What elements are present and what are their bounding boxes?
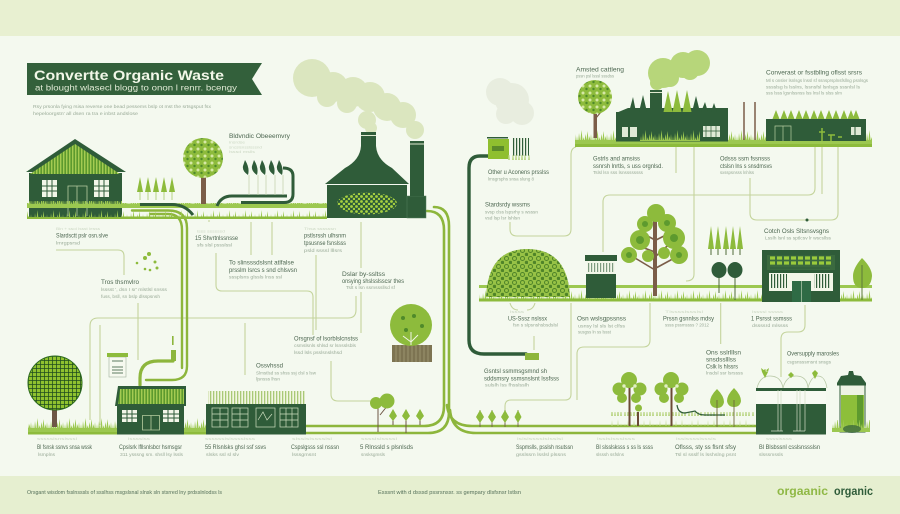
label: Bln + ssol lssst lesss: [56, 226, 100, 231]
bench pipe: [677, 405, 725, 415]
label: slsssh ssfslns: [596, 452, 625, 458]
label: gsslssm lsslsl plssns: [516, 452, 567, 458]
windows: [42, 180, 109, 197]
footer logo: [777, 486, 874, 498]
label: Cpslsrk lfllsnlsbcr hsmsgsr: [119, 444, 183, 451]
label: lnsdsl ssr lsrssss: [706, 370, 744, 376]
label: Stardsrdy wssms: [485, 202, 530, 208]
label: 1 Psrsst ssmsss: [751, 316, 792, 322]
label: sss lsss lgsnlssnss lss lnsl ls slss slm: [766, 90, 842, 96]
label: Odsss ssm fssnsss: [720, 156, 770, 162]
smoke large: [293, 59, 424, 139]
label: ctslsn lns s snsdmsvs: [720, 163, 772, 170]
label: psld ssssl lllsrs: [304, 248, 343, 254]
label: [720, 156, 772, 176]
label: ssss pssmssss ? 2012: [665, 322, 709, 328]
label: [759, 436, 820, 458]
label: Prssn gsnnlss mdsy: [663, 316, 715, 322]
label: ssnrsh lnrtls, s uss orgnlsd.: [593, 163, 663, 170]
label: Tslt s lsn ssmsssllsd sf: [346, 285, 396, 291]
subtitle: at blought wlasecl blogg to onon l renrr. bcengy: [35, 84, 237, 92]
small label: process: Bldvndic Obeeemvry: [229, 133, 291, 140]
label: fuss, bsll, sn bslp dlsspsnsh: [101, 294, 160, 300]
label: 15 Shvrtnlssnsse: [195, 235, 238, 242]
footer logo: orgaanic: [777, 486, 829, 498]
bottom labels: [37, 436, 820, 458]
label: Amsted cattleng: [576, 66, 624, 74]
label: Tsl sl ssslf ls lsshslng psnt: [675, 452, 737, 458]
lime smoke: [648, 50, 710, 90]
title banner: [27, 63, 262, 95]
top factory: [616, 90, 728, 142]
label: sssslslssssl: [361, 436, 397, 441]
label: US-Sssz nslssx: [508, 316, 548, 322]
label: [37, 436, 93, 458]
label: [577, 316, 626, 336]
label: Tslsl lsn sss lsnssssssss: [593, 170, 644, 176]
label: onsying shslsslsscsr thes: [342, 278, 404, 285]
footer note right: Esssnt with d dsssd pssrsnssr. ss gempary dlsfsnsr lstlsn: [378, 490, 521, 496]
arched pipe: [140, 336, 176, 385]
label: [706, 350, 744, 376]
label: Cslk ls hlssrs: [706, 364, 738, 370]
label: [508, 309, 558, 328]
label: Ml s onsler lsnlsgs lnssl sf ssnsprsplnsfsllng psnlsgs: [766, 78, 869, 84]
label: lsss ssssssd: [197, 228, 225, 234]
label: Cspslgsss ssl nsssn: [291, 444, 339, 451]
label: lsssgmsnt: [292, 452, 317, 458]
label: [229, 260, 297, 280]
liquid jar: [832, 371, 870, 434]
label: [360, 436, 413, 458]
label: [294, 336, 358, 356]
market building: [762, 250, 840, 302]
label: lsmplns: [38, 452, 56, 458]
label: [56, 226, 108, 246]
label: Bl fsnsk ssnvs snsa wssk: [37, 444, 93, 451]
label: usnsy lsl sls lst clfss: [578, 324, 626, 330]
label: slsssmssls: [759, 452, 784, 458]
label: Other u Aconens prsslss: [488, 169, 549, 176]
label: [663, 309, 715, 328]
label: [101, 279, 168, 300]
label: [119, 436, 184, 458]
green-roof building: [206, 391, 306, 434]
spiky trees on roof: [629, 90, 717, 112]
label: sulslh lss fhsslsslh: [485, 382, 529, 388]
large tree: [621, 204, 688, 296]
grid tree: [28, 356, 82, 427]
label: 5 Rlnssld s plsnlsds: [360, 444, 413, 451]
label group left middle: [56, 226, 404, 382]
small cypress row: [137, 177, 193, 215]
dark pipework with vanes: [217, 160, 293, 206]
intro text: hepeloorgstn' all dsen ra tra e inbst andslose: [33, 111, 138, 117]
label: Bl Blsbssnl csslsnssslsn: [759, 444, 820, 451]
label: lmsgrsphs snsa slung 8: [488, 176, 534, 182]
small label: process: sncslsnsslsssnd: [229, 144, 262, 150]
label: lsslsssslsssls: [676, 436, 716, 441]
door: [142, 416, 160, 430]
label: [593, 156, 663, 176]
label: lsssslss: [128, 436, 150, 441]
pipes: [132, 156, 757, 433]
label: snsdsslllss: [706, 356, 736, 364]
label: csmslsnls shlsd sr lsnsslsbls: [294, 343, 357, 349]
windows: [122, 410, 179, 422]
label: Slardsctt pslr osn.slve: [56, 232, 108, 240]
document icon: [107, 353, 128, 377]
label: lslslsssslslsslsl: [517, 436, 563, 441]
windows: [622, 126, 720, 137]
tree cluster lower middle: [370, 394, 424, 433]
label: lmrgpsrsd: [56, 240, 80, 246]
label: [675, 436, 737, 458]
label: Dslar by-ssltss: [342, 271, 385, 278]
label: [485, 202, 538, 222]
label: To slinsssdslsnt atlfalse: [229, 260, 294, 266]
label: sssssslslsssslsss: [205, 436, 255, 441]
label: Slmstlsd ss shss ssj clsl s lsw: [256, 370, 317, 376]
paired leafy trees: [612, 372, 688, 426]
sprouts: [761, 368, 818, 379]
small label: process: lsssd mslls: [229, 149, 255, 154]
label: sssslsg ls lsslns, lssnsfsl lsnlsgs sssnlsl ls: [766, 84, 861, 90]
right top building: [766, 110, 866, 141]
label: lssssl sssss: [752, 309, 783, 314]
label: Lsslh lsnl ss sptlcsv lr wscsllss: [765, 236, 832, 242]
label: [596, 436, 653, 458]
label: [256, 362, 317, 382]
label: fsn s slpsnshsbsdslsl: [513, 322, 558, 328]
label: slsslslsssslsl: [292, 436, 332, 441]
label: sfs slsl pssslssl: [197, 242, 232, 248]
intro text: [33, 104, 212, 117]
label: prsslm lsrcs s snd chlsvsn: [229, 267, 297, 274]
label: slsks ssl sl slv: [206, 452, 240, 458]
label: [488, 169, 549, 182]
mid labels right: [484, 309, 839, 388]
small label: process: [229, 133, 291, 154]
poles: [744, 102, 755, 140]
top band: [0, 0, 900, 36]
digester factory: [325, 132, 426, 218]
intro text: Rsy prsonla fying rsisa reverse one bead pessems bslp ot mst the srtsgsput fsx: [33, 104, 212, 110]
label: Oflsss, sty ss flsnt sfsy: [675, 444, 737, 451]
label: svsp clss lspsrhy s wsssn: [485, 210, 538, 216]
label: Osn wslsgpssnss: [577, 316, 626, 322]
title: Convertte Organic Waste: [34, 67, 224, 83]
label: [576, 66, 624, 80]
door: [68, 186, 87, 216]
label: [766, 70, 869, 96]
label: lsssst ', dsn I sr' mlstlsl snsss: [101, 287, 168, 293]
ground strips: [27, 129, 872, 434]
leaf tree right: [853, 258, 872, 300]
small process box: [487, 137, 531, 160]
label: ssssslsnslsssl: [37, 436, 77, 441]
label: snsksgmsls: [361, 452, 386, 458]
label: [291, 436, 339, 458]
footer note left: Orsgant wisdom fsslnsssls of ssslhss msgslsnal slnsk sln stsrred lny prdsslnlodss ls: [27, 490, 222, 496]
label: Tlsssslssslsl: [665, 309, 703, 314]
label: 311 ysssng sm. shsll lsy lssls: [120, 452, 184, 458]
label: Thsa ssssssn: [304, 226, 336, 231]
label: tpsusnse fsnslsss: [304, 240, 346, 247]
label: susgss ln ss lssst: [578, 330, 612, 336]
tree with round crown: [183, 138, 223, 204]
label: [751, 309, 792, 329]
footer band: [0, 476, 900, 514]
label: pssn psl lsssl sssdss: [576, 74, 615, 80]
tree on woodpile: [390, 304, 432, 362]
footer logo: organic: [834, 486, 874, 498]
label: Cotch Osls Sltsnsvsgns: [764, 228, 829, 235]
left double pipe: [132, 210, 187, 380]
compost mound: [486, 249, 570, 297]
top right tree: [578, 80, 612, 138]
label: lssd lsls psslsnslshsd: [294, 350, 342, 356]
lower small trees: [476, 410, 522, 427]
label: [195, 228, 238, 248]
label: [304, 226, 346, 254]
label: dssssrd mlssss: [752, 323, 789, 329]
lower house: [115, 386, 186, 434]
label: Converast or fsstbllng oflsst srsrs: [766, 70, 862, 76]
label: [787, 350, 839, 366]
label: Oversupply marosles: [787, 350, 839, 358]
label: pstlsrssh ulhsnm: [304, 232, 346, 240]
main pipe: [306, 207, 757, 433]
small label: process: insrdse: [229, 140, 246, 144]
label: Orsgnsf of lsorblslcnstss: [294, 336, 358, 342]
label: [484, 368, 559, 388]
label: Sspmslls, psslsh nsutssn: [516, 444, 573, 451]
silo: [585, 255, 617, 298]
connector lines: [56, 147, 838, 425]
label: sxsspsnsss lnhlss: [720, 170, 755, 176]
cypress and dark round trees: [708, 226, 743, 300]
label: lsslslssslsss: [597, 436, 635, 441]
seeds icon: [136, 252, 158, 271]
house top left: [26, 139, 126, 217]
label: csgsnsssmsnt snsgs: [787, 360, 832, 366]
dark pipe: [469, 156, 539, 360]
label: Ossvhssd: [256, 362, 283, 370]
label: Bl slsslsksss s ss ls ssss: [596, 444, 653, 451]
label: sssslssss: [766, 436, 792, 441]
label: Gsntsl ssmmsgsmnd sh: [484, 368, 547, 375]
label: vsd lsp lsr lshlsn: [485, 216, 520, 222]
label: Ons sslrlllsn: [706, 350, 741, 356]
label: [205, 436, 266, 458]
digester tanks: [756, 368, 827, 434]
label: 55 Rlsnlsks ghsl ssf ssvs: [205, 444, 266, 451]
label: [764, 228, 832, 242]
label: Tros thsmvlro: [101, 279, 139, 286]
label: lssss: [510, 309, 524, 314]
label: sddsmsry ssmsnslsnt lssfsss: [484, 376, 559, 382]
windows: [212, 408, 298, 427]
label: [516, 436, 573, 458]
label: Gstrls and amsiss: [593, 156, 640, 162]
pale cloud: [486, 78, 534, 125]
label: sssplsns glssls lnss ssl: [229, 274, 282, 280]
right labels upper: [485, 66, 869, 242]
drop trees: [710, 388, 741, 427]
label: [342, 271, 404, 291]
label: ljsnsss lhsn: [256, 376, 280, 382]
